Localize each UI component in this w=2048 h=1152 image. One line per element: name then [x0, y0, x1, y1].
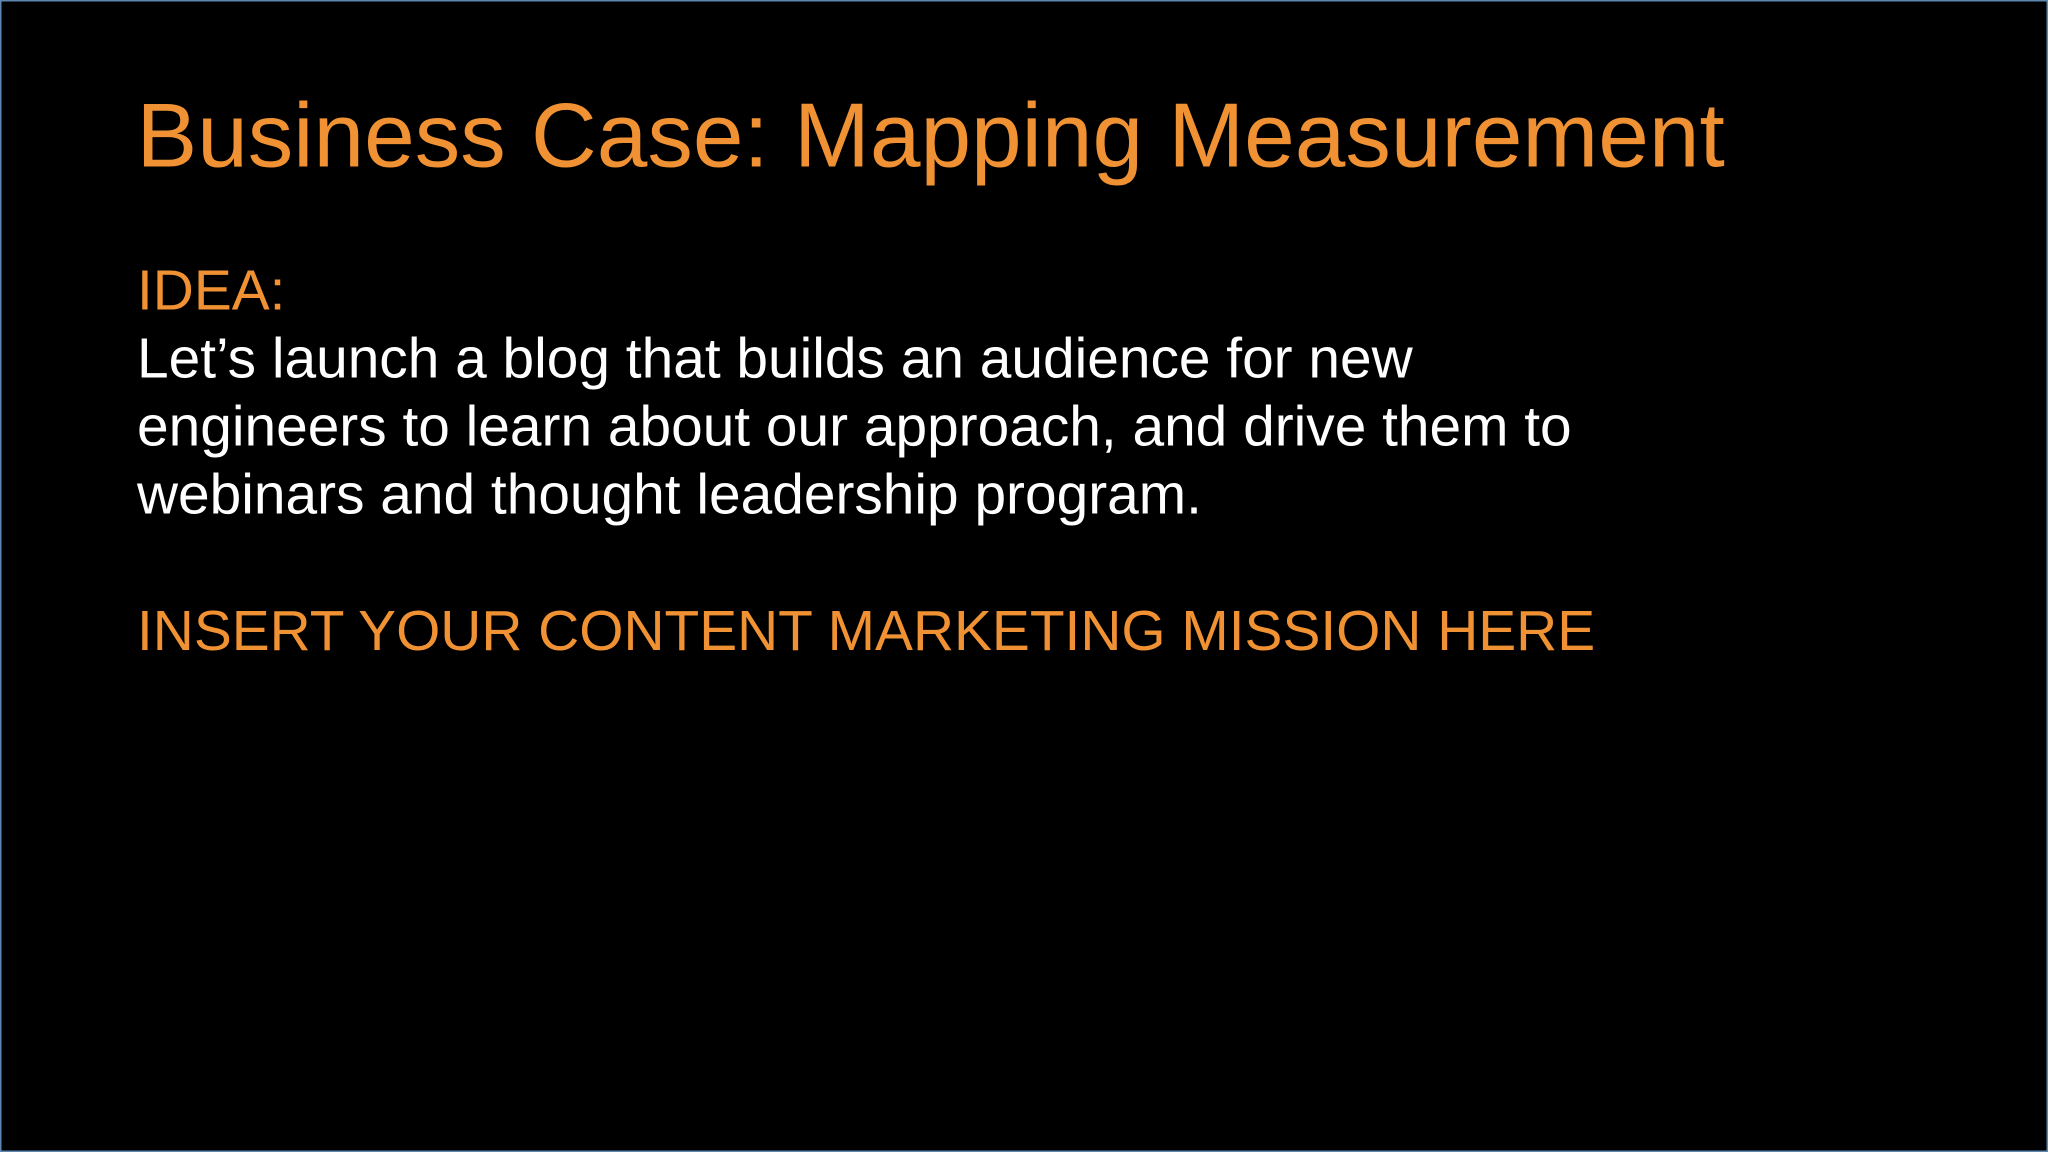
mission call to action: INSERT YOUR CONTENT MARKETING MISSION HERE [137, 600, 1595, 663]
idea body text: engineers to learn about our approach, and drive them to [137, 396, 1572, 458]
idea body text [136, 328, 1572, 526]
title: Business Case: Mapping Measurement [136, 86, 1725, 186]
idea body text: webinars and thought leadership program. [136, 464, 1202, 526]
idea label: IDEA: [137, 260, 285, 322]
idea body text: Let’s launch a blog that builds an audience for new [137, 328, 1414, 390]
